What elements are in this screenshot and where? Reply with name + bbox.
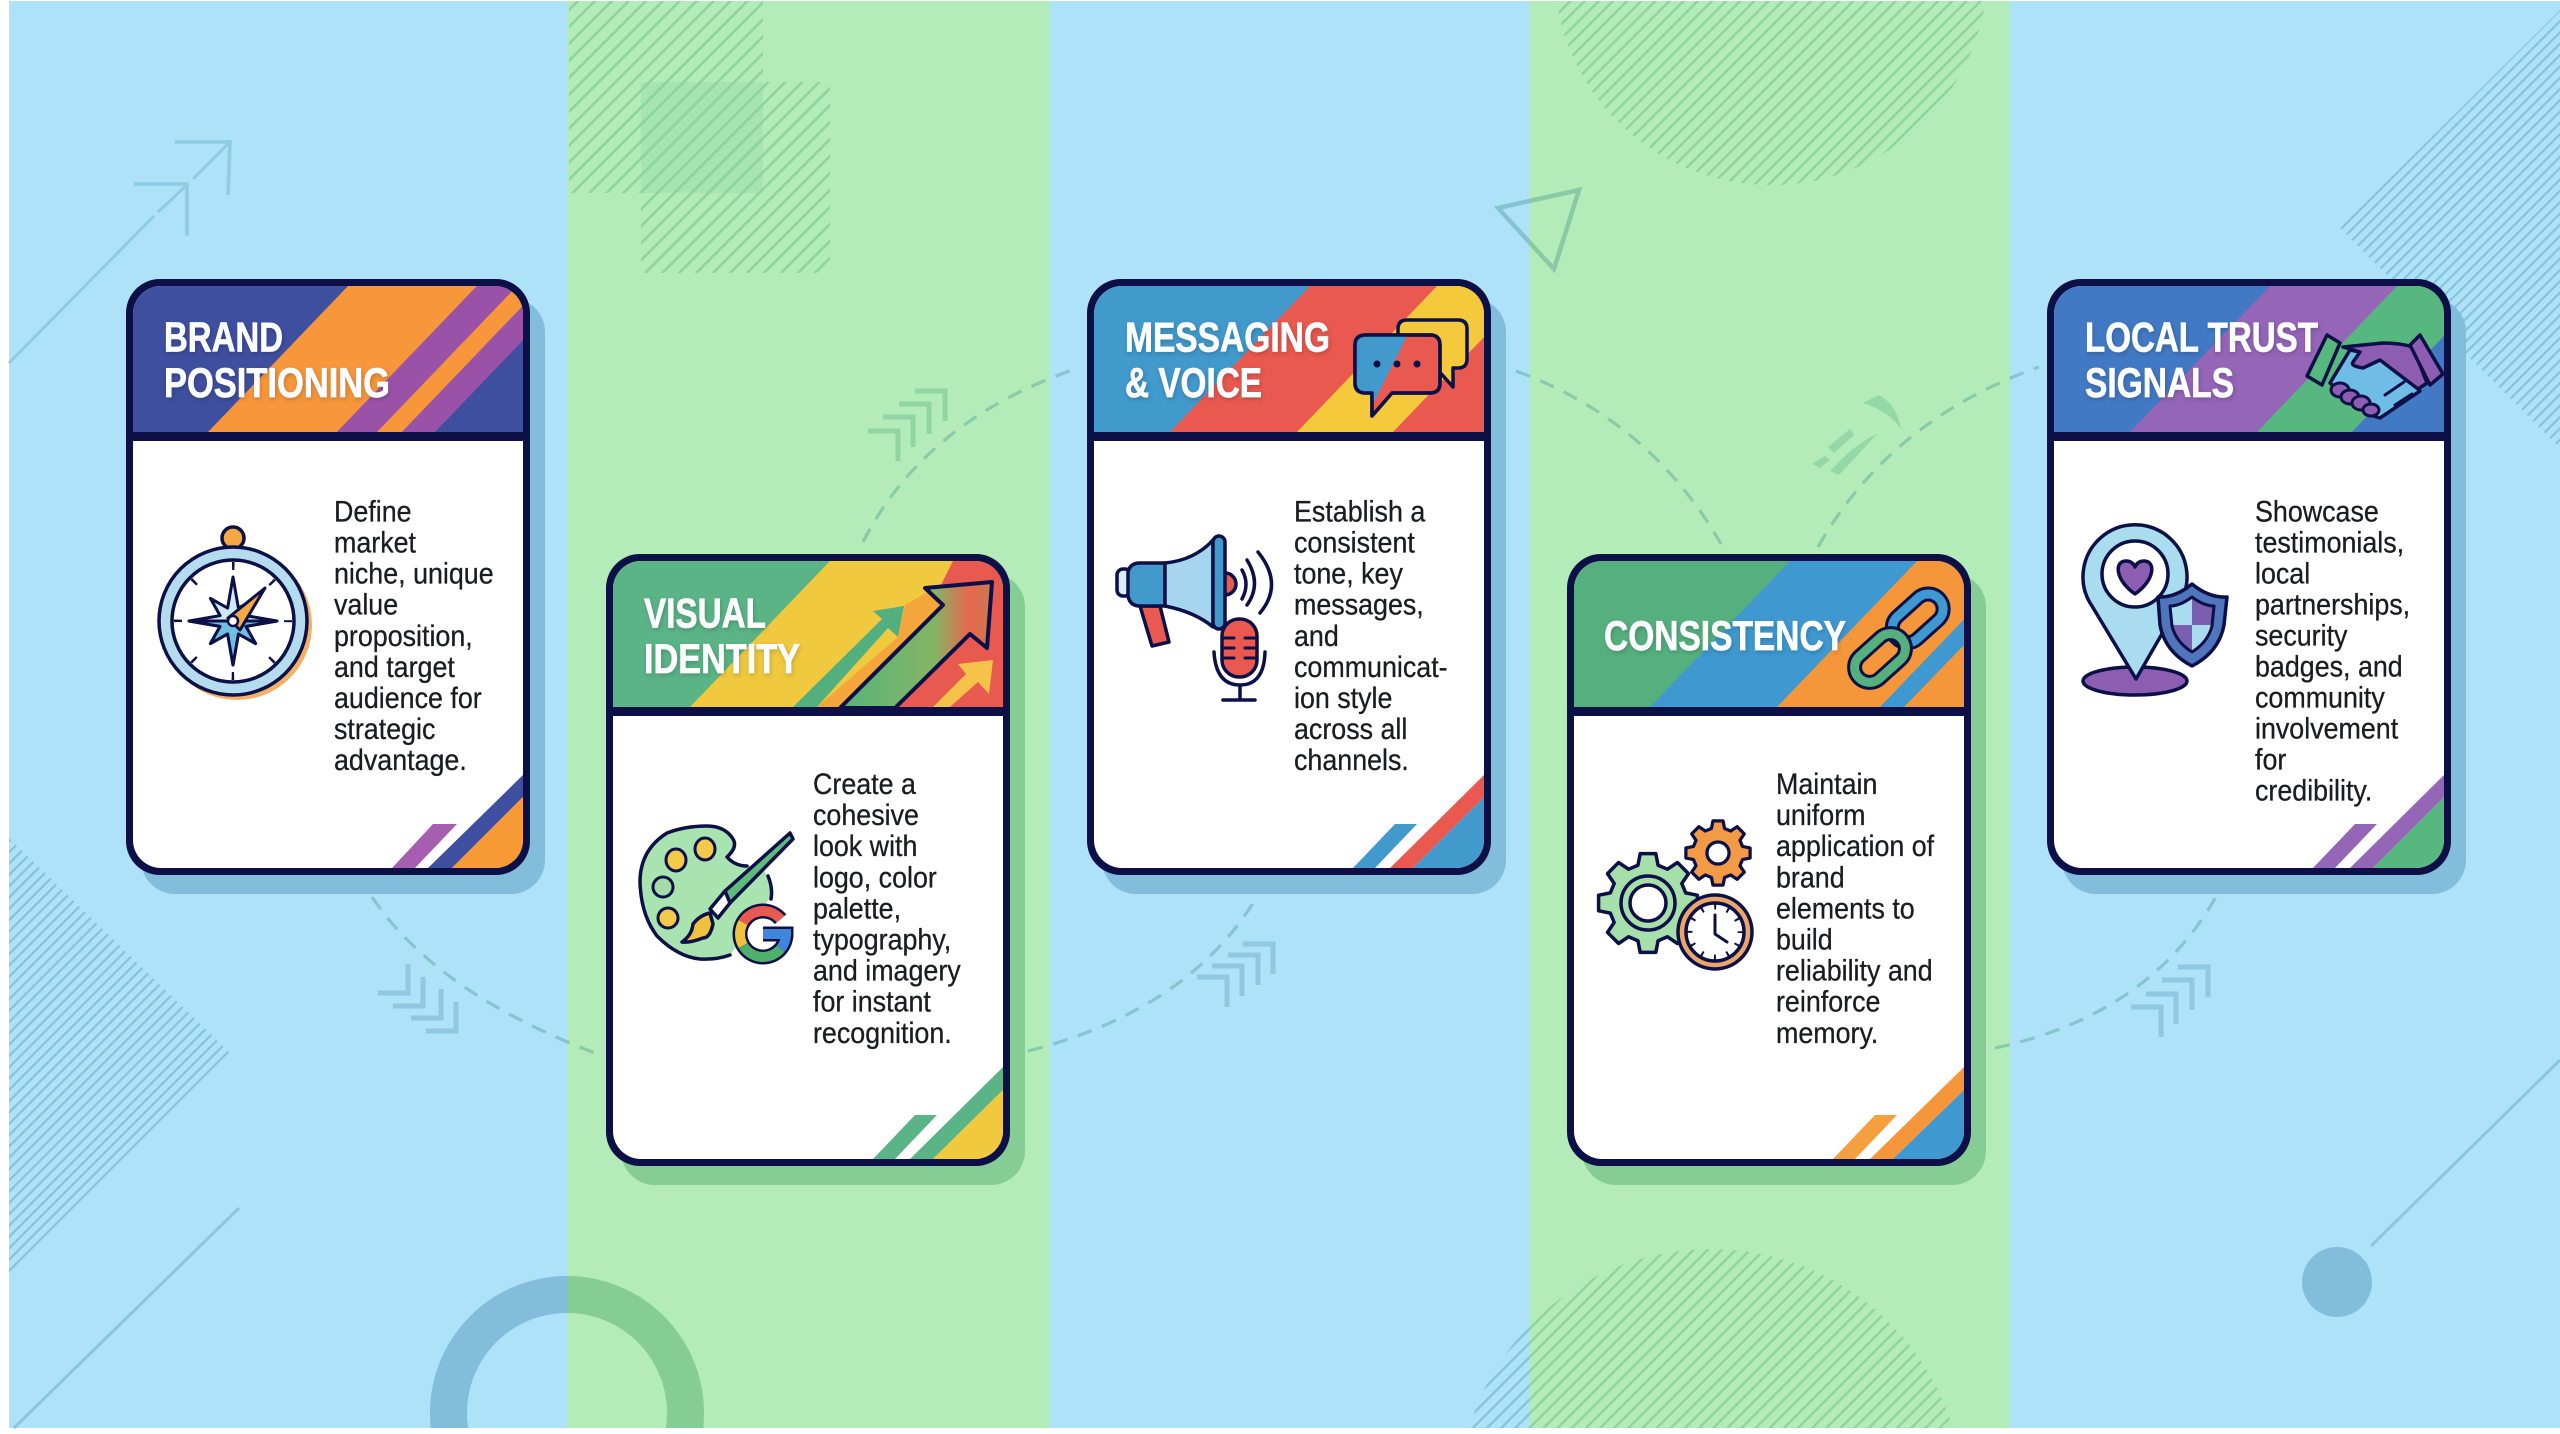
body text: uniform (1776, 799, 1865, 832)
body text: channels. (1294, 744, 1409, 777)
body text: for (2255, 743, 2286, 777)
body text: Maintain (1776, 768, 1877, 801)
chevrons column 1 (378, 964, 456, 1031)
icon: compass (159, 527, 312, 700)
body text: partnerships, (2255, 588, 2410, 622)
body text: niche, unique (334, 557, 494, 591)
heading: POSITIONING (164, 359, 390, 406)
heading: & VOICE (1125, 359, 1262, 406)
hatched triangle left (9, 838, 232, 1275)
thin line bottom left (14, 1208, 239, 1428)
heading (644, 589, 800, 682)
icon: speech bubbles (1350, 320, 1467, 420)
body text: application of (1776, 830, 1934, 864)
body text: reinforce (1776, 985, 1880, 1019)
body text: security (2255, 619, 2348, 653)
body text: strategic (334, 713, 435, 746)
panel: consistency (1567, 554, 2020, 1185)
heading: CONSISTENCY (1604, 612, 1846, 659)
body text: consistent (1294, 526, 1415, 560)
body text: messages, (1294, 588, 1424, 622)
body text: memory. (1776, 1016, 1878, 1050)
body text: build (1776, 923, 1833, 957)
body text: logo, color (813, 861, 937, 895)
icon: shield (2158, 584, 2227, 666)
arrow top left (9, 142, 230, 363)
heading: VISUAL (644, 589, 766, 636)
body text: credibility. (2255, 774, 2372, 808)
broken shape column 4 (1812, 395, 1901, 475)
body text: communicat- (1294, 651, 1448, 684)
body text: recognition. (813, 1016, 952, 1050)
body text: ion style (1294, 682, 1392, 715)
body text: for instant (813, 985, 931, 1019)
header stripes (1094, 286, 1484, 868)
icon: gears and clock (1599, 821, 1752, 969)
body text: and imagery (813, 954, 961, 988)
body text: badges, and (2255, 650, 2403, 684)
heading: BRAND (164, 314, 283, 361)
body text: audience for (334, 682, 482, 715)
icon: chain link (1848, 588, 1949, 689)
body text: cohesive (813, 799, 919, 832)
icon: megaphone (1117, 536, 1272, 646)
icon: handshake (2307, 335, 2443, 418)
panel: local trust signals (2047, 279, 2492, 894)
heading: IDENTITY (644, 635, 800, 682)
panel: brand positioning (126, 279, 575, 894)
chevrons column 5 (2131, 967, 2208, 1037)
body text: Establish a (1294, 495, 1425, 529)
header stripes (133, 286, 523, 868)
header stripes and arrows (613, 561, 1003, 1159)
body text: and target (334, 651, 455, 684)
heading: SIGNALS (2085, 359, 2234, 406)
heading: MESSAGING (1125, 314, 1330, 361)
body text: tone, key (1294, 557, 1404, 591)
heading (164, 314, 390, 406)
body text: proposition, (334, 619, 473, 653)
heading (2085, 314, 2318, 406)
header stripes (2054, 286, 2444, 868)
body text: Showcase (2255, 495, 2379, 529)
panel: visual identity (606, 554, 1025, 1185)
ring bottom (430, 1276, 704, 1428)
hatched rectangles top (569, 1, 830, 273)
connector dashed arcs (372, 367, 2217, 1056)
hatched dome bottom (1469, 1249, 1953, 1428)
body text: across all (1294, 713, 1407, 746)
body text: community (2255, 681, 2385, 715)
body text: local (2255, 557, 2310, 591)
hatched triangle top right (2340, 10, 2560, 448)
chevrons column 3 (1197, 944, 1273, 1007)
triangle outline (1498, 190, 1579, 269)
body text: typography, (813, 923, 951, 957)
body text: reliability and (1776, 954, 1933, 988)
panel: messaging and voice (1087, 279, 1533, 894)
icon: palette and brush (640, 826, 793, 959)
icon: G logo (733, 904, 793, 964)
body text: elements to (1776, 892, 1915, 926)
heading: LOCAL TRUST (2085, 314, 2318, 361)
body text: value (334, 588, 398, 622)
body text: Define (334, 495, 412, 529)
icon: location pin with heart (2083, 525, 2187, 695)
body text: Create a (813, 768, 916, 801)
thin line and dot bottom right (2302, 1060, 2560, 1317)
body text: advantage. (334, 744, 467, 777)
body text: market (334, 526, 416, 560)
body text: palette, (813, 892, 901, 926)
body text: involvement (2255, 712, 2398, 746)
header stripes (1574, 561, 1964, 1159)
chevrons column 2 (868, 391, 945, 461)
body text: brand (1776, 861, 1845, 895)
hatched dome top (1556, 1, 1986, 185)
icon: microphone (1214, 619, 1265, 700)
body text: testimonials, (2255, 526, 2404, 560)
body text: look with (813, 830, 917, 864)
body text: and (1294, 619, 1339, 653)
heading (1125, 314, 1330, 406)
